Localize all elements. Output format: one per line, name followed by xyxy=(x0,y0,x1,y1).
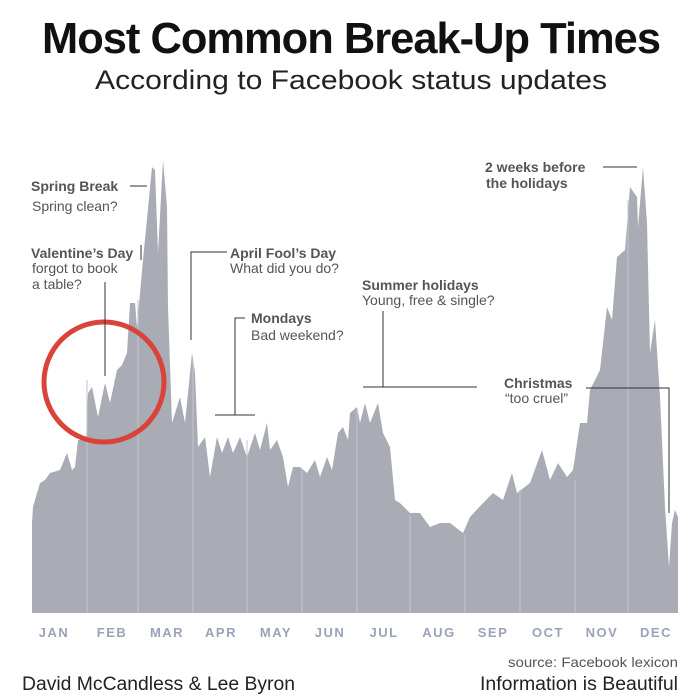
annotation: spring break: Spring Break xyxy=(31,178,118,194)
annotation: 2 weeks before holidays: the holidays xyxy=(486,175,568,191)
annotation: summer holidays: Summer holidays xyxy=(362,277,479,293)
annotation: valentine's day: Valentine’s Day xyxy=(31,245,133,261)
title: Most Common Break-Up Times xyxy=(42,14,660,63)
annotation: summer holidays: Young, free & single? xyxy=(362,292,495,308)
annotation: christmas: “too cruel” xyxy=(505,390,568,406)
annotation: 2 weeks before holidays xyxy=(485,159,637,191)
month axis labels: JAN xyxy=(39,625,69,640)
month axis labels: MAY xyxy=(260,625,292,640)
annotation: valentine's day: forgot to book xyxy=(32,260,119,276)
annotation: christmas: Christmas xyxy=(504,375,573,391)
month axis labels: JUL xyxy=(369,625,399,640)
annotation: mondays: Bad weekend? xyxy=(251,327,344,343)
annotation: mondays: Mondays xyxy=(251,310,312,326)
area chart xyxy=(32,160,678,613)
month axis labels: AUG xyxy=(422,625,456,640)
annotation: summer holidays xyxy=(362,277,495,387)
month axis labels: SEP xyxy=(478,625,508,640)
annotation: 2 weeks before holidays: 2 weeks before xyxy=(485,159,586,175)
footer: source: source: Facebook lexicon xyxy=(508,654,678,670)
footer: authors: David McCandless & Lee Byron xyxy=(22,674,295,695)
annotation: mondays xyxy=(215,310,344,415)
annotation: spring break: Spring clean? xyxy=(32,198,118,214)
month axis labels: MAR xyxy=(150,625,184,640)
annotation: april fool's day: What did you do? xyxy=(230,260,339,276)
month axis labels: DEC xyxy=(640,625,672,640)
month axis labels: JUN xyxy=(315,625,345,640)
month axis labels xyxy=(39,625,672,640)
annotation: valentine's day xyxy=(31,245,141,376)
annotation: april fool's day xyxy=(191,245,339,340)
annotation: valentine's day: a table? xyxy=(32,276,82,292)
month axis labels: NOV xyxy=(586,625,618,640)
annotation: april fool's day: April Fool’s Day xyxy=(230,245,336,261)
annotation: spring break xyxy=(31,178,147,214)
month axis labels: OCT xyxy=(532,625,564,640)
subtitle: According to Facebook status updates xyxy=(95,65,607,95)
red circle highlight xyxy=(44,322,164,442)
month axis labels: APR xyxy=(205,625,237,640)
footer: brand: Information is Beautiful xyxy=(480,674,678,695)
month axis labels: FEB xyxy=(97,625,127,640)
annotation: christmas xyxy=(504,375,669,513)
